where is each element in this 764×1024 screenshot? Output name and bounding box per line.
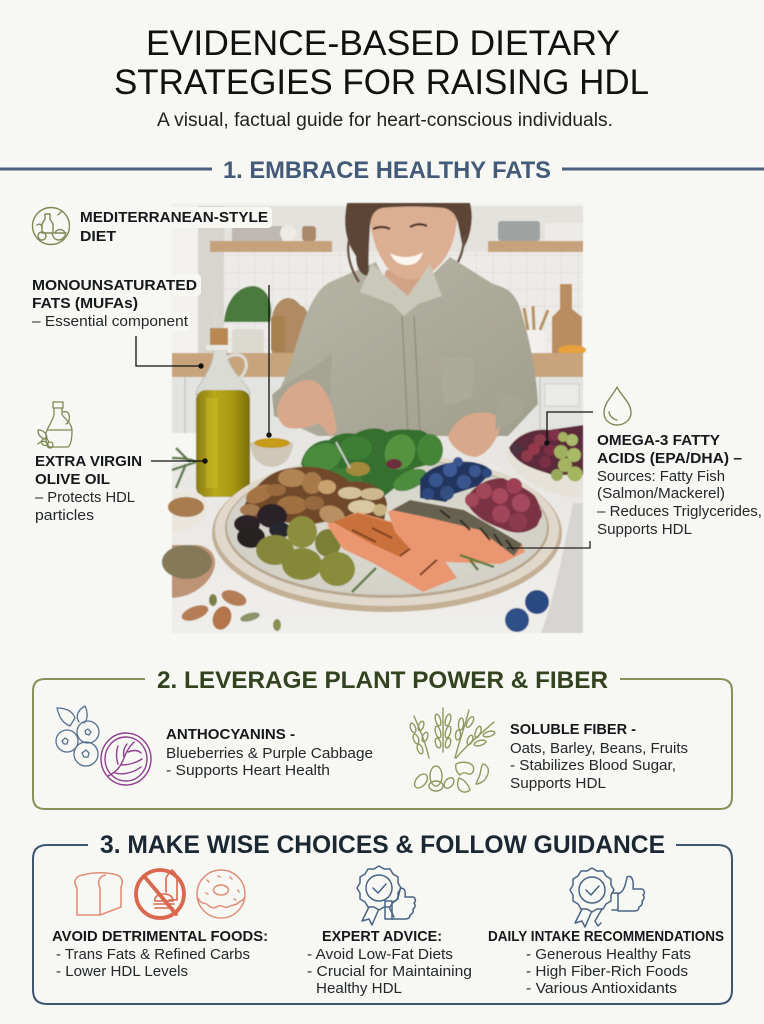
left bowls xyxy=(172,493,208,533)
leader line: omega-3 to grape bowl xyxy=(545,412,593,445)
callout: extra virgin olive oil: OLIVE OIL xyxy=(35,471,110,488)
callout: omega-3 fatty acids xyxy=(597,432,762,538)
text: anthocyanins xyxy=(166,726,373,779)
text: avoid detrimental foods: - Lower HDL Levels xyxy=(56,964,188,980)
subtitle: A visual, factual guide for heart-conscious individuals. xyxy=(157,110,613,131)
icon: bread xyxy=(75,873,122,915)
callout: Mediterranean-style diet: DIET xyxy=(80,228,116,245)
olive oil bottle xyxy=(196,347,250,395)
text: expert advice: Healthy HDL xyxy=(316,981,402,997)
callout: omega-3 fatty acids: ACIDS (EPA/DHA) – xyxy=(597,450,742,467)
panel: wise choices and guidance xyxy=(33,831,732,1004)
callout: monounsaturated fats xyxy=(32,274,201,331)
salmon fillet 1 xyxy=(327,512,457,592)
almonds xyxy=(180,602,210,624)
callout: monounsaturated fats: – Essential component xyxy=(32,314,188,330)
text: expert advice: EXPERT ADVICE: xyxy=(322,928,442,945)
text: daily intake recommendations: DAILY INTAKE RECOMMENDATIONS xyxy=(488,928,724,945)
title: EVIDENCE-BASED DIETARY xyxy=(146,24,620,63)
icon: blueberries xyxy=(56,706,99,766)
leader line: omega-3 to salmon xyxy=(507,541,590,548)
icon: olive oil bottle xyxy=(38,402,72,448)
heading: make wise choices: 3. MAKE WISE CHOICES & FOLLOW GUIDANCE xyxy=(100,831,665,859)
text: soluble fiber: Oats, Barley, Beans, Fruits xyxy=(510,741,688,757)
text: soluble fiber: SOLUBLE FIBER - xyxy=(510,721,636,738)
callout: omega-3 fatty acids: Supports HDL xyxy=(597,522,692,538)
callout: monounsaturated fats: FATS (MUFAs) xyxy=(32,295,138,312)
text: daily intake recommendations: - Various Antioxidants xyxy=(526,981,677,997)
text: anthocyanins: - Supports Heart Health xyxy=(166,763,330,779)
callout: extra virgin olive oil: – Protects HDL xyxy=(35,490,135,506)
leader line: MUFAs to counter bottle xyxy=(136,336,203,368)
text: daily intake recommendations: - Generous Healthy Fats xyxy=(526,947,691,963)
green olives xyxy=(256,535,294,565)
leader line: olive oil xyxy=(151,459,207,463)
callout: Mediterranean-style diet xyxy=(32,207,272,245)
text: avoid detrimental foods: AVOID DETRIMENTAL FOODS: xyxy=(52,928,268,945)
text: expert advice: - Crucial for Maintaining xyxy=(307,964,472,980)
grapes on plate xyxy=(465,478,541,533)
grape bowl xyxy=(506,427,583,498)
herbs xyxy=(352,555,494,592)
text: avoid detrimental foods: - Trans Fats & Refined Carbs xyxy=(56,947,250,963)
small oil bowl xyxy=(250,438,293,467)
icon: purple cabbage xyxy=(101,733,151,785)
icon: mediterranean plate xyxy=(32,208,70,244)
callout: omega-3 fatty acids: Sources: Fatty Fish xyxy=(597,469,725,485)
heading: leverage plant power: 2. LEVERAGE PLANT POWER & FIBER xyxy=(157,667,608,694)
text: soluble fiber xyxy=(510,721,688,792)
leader line: Mediterranean diet to oil bowl xyxy=(267,285,271,437)
text: expert advice xyxy=(307,928,472,997)
callout: extra virgin olive oil: particles xyxy=(35,508,94,524)
section heading: 1. Embrace Healthy Fats: 1. EMBRACE HEALTHY FATS xyxy=(223,157,551,184)
text: soluble fiber: Supports HDL xyxy=(510,776,606,792)
callout: monounsaturated fats: MONOUNSATURATED xyxy=(32,277,197,294)
callout: omega-3 fatty acids: – Reduces Triglycerides, xyxy=(597,504,762,520)
text: anthocyanins: Blueberries & Purple Cabbage xyxy=(166,746,373,762)
title: STRATEGIES FOR RAISING HDL xyxy=(114,63,649,102)
salmon fillet 2 xyxy=(388,500,525,564)
photo: woman preparing a Mediterranean plate xyxy=(162,203,586,633)
plate xyxy=(212,454,562,612)
text: daily intake recommendations: - High Fiber-Rich Foods xyxy=(526,964,688,980)
woman xyxy=(274,257,538,436)
text: soluble fiber: - Stabilizes Blood Sugar, xyxy=(510,758,676,774)
callout: omega-3 fatty acids: (Salmon/Mackerel) xyxy=(597,486,725,502)
text: avoid detrimental foods xyxy=(52,928,268,980)
panel: plant power and fiber xyxy=(33,667,732,809)
callout: Mediterranean-style diet: MEDITERRANEAN-STYLE xyxy=(80,209,268,226)
title xyxy=(114,24,649,102)
text: daily intake recommendations xyxy=(488,928,724,997)
text: anthocyanins: ANTHOCYANINS - xyxy=(166,726,295,743)
salad xyxy=(301,428,439,502)
text: expert advice: - Avoid Low-Fat Diets xyxy=(307,947,453,963)
callout: extra virgin olive oil: EXTRA VIRGIN xyxy=(35,453,142,470)
callout: omega-3 fatty acids: OMEGA-3 FATTY xyxy=(597,432,720,449)
loose blueberries xyxy=(525,590,549,614)
icon: wheat and beans xyxy=(409,708,495,792)
icon: oil drop xyxy=(604,387,631,425)
icon: award ribbon with thumb (expert advice) xyxy=(357,866,415,925)
blueberries on plate xyxy=(420,462,492,502)
icon: award ribbon with thumb (daily intake) xyxy=(570,868,644,927)
icon: donut xyxy=(197,870,245,918)
nuts xyxy=(242,467,387,526)
rosemary xyxy=(172,448,196,488)
icon: no fast food xyxy=(136,870,184,918)
callout: extra virgin olive oil xyxy=(35,453,142,524)
black olives xyxy=(234,515,260,533)
